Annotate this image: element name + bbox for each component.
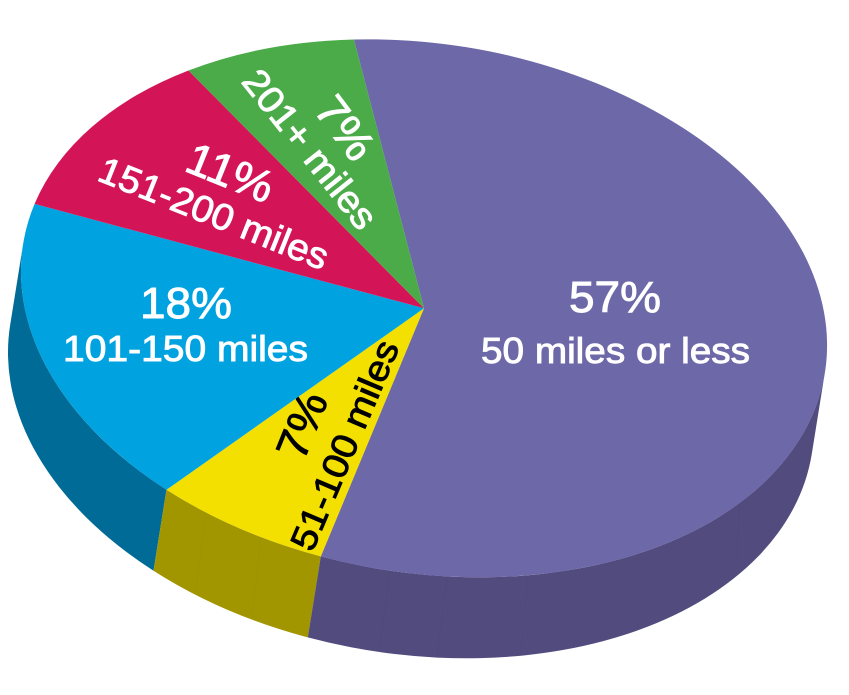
- slice: 201+ miles: [188, 40, 424, 308]
- slice: 51-100 miles: [166, 308, 424, 556]
- label: 18% 101-150 miles: 101-150 miles: [63, 328, 308, 369]
- label: 57% 50 miles or less: [481, 273, 750, 371]
- side wall: purple: [308, 373, 825, 658]
- label: 7% 51-100 miles: 7%: [267, 385, 338, 466]
- label: 57% 50 miles or less: 50 miles or less: [481, 330, 750, 371]
- side wall: blue: [8, 244, 167, 571]
- label: 18% 101-150 miles: [63, 279, 308, 369]
- label: 7% 51-100 miles: 51-100 miles: [282, 334, 407, 556]
- side wall: yellow: [154, 490, 321, 637]
- slice: 151-200 miles: [35, 70, 424, 308]
- slice: 50 miles or less: [321, 39, 827, 577]
- label: 7% 201+ miles: 7%: [305, 86, 385, 170]
- label: 11% 151-200 miles: 11%: [179, 132, 282, 213]
- label: 11% 151-200 miles: 151-200 miles: [93, 149, 335, 278]
- slice: 101-150 miles: [21, 204, 424, 490]
- label: 7% 201+ miles: 201+ miles: [234, 61, 385, 237]
- label: 18% 101-150 miles: 18%: [140, 279, 232, 328]
- label: 57% 50 miles or less: 57%: [569, 273, 661, 322]
